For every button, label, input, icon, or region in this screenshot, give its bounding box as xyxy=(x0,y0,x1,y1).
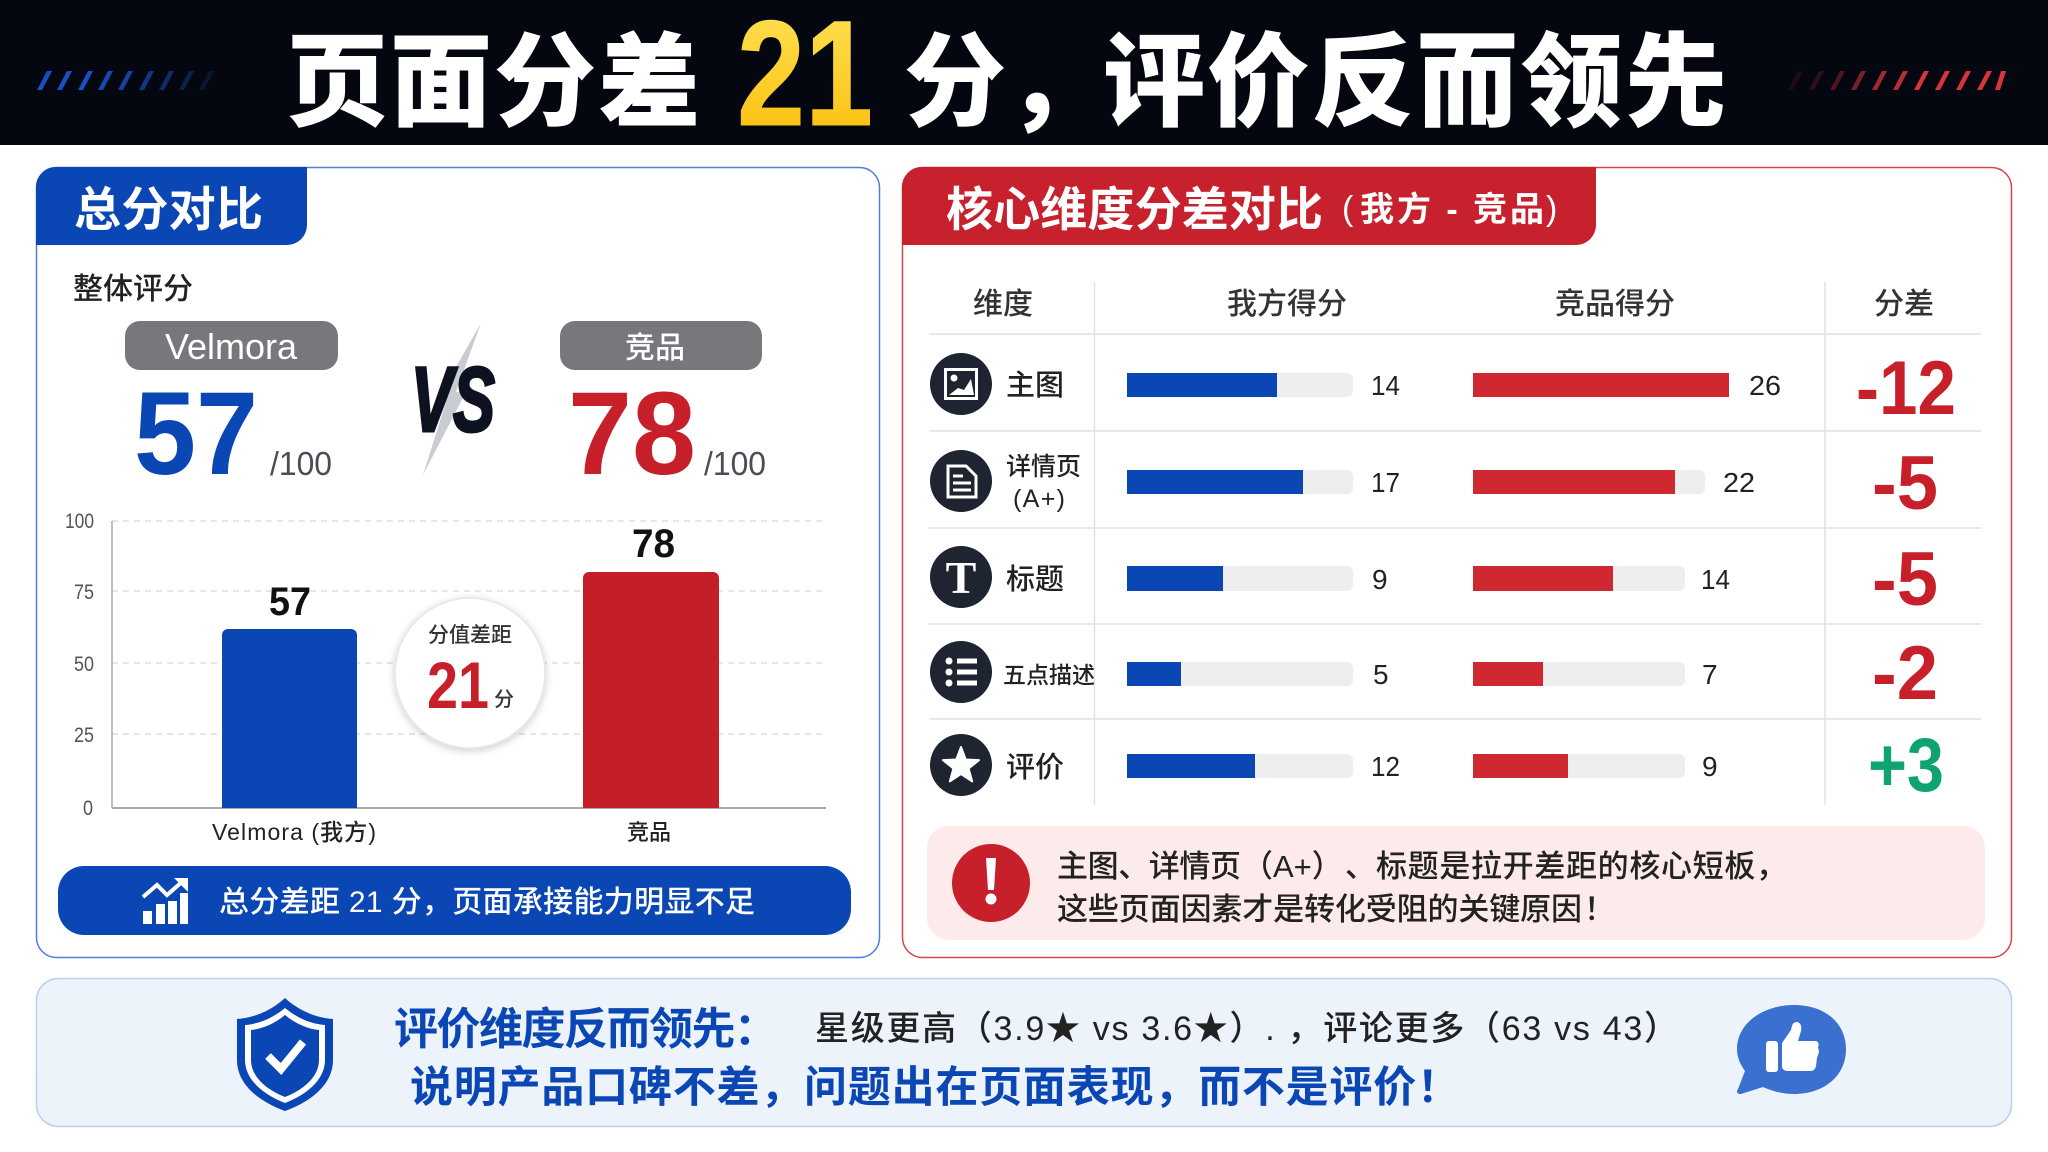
callout: key finding: 、 xyxy=(1345,849,1376,884)
gap value: -5 xyxy=(1872,441,1938,526)
bar: competitor xyxy=(583,572,719,808)
my score bar: 17 xyxy=(1371,467,1400,498)
competitor score bar xyxy=(1473,370,1781,401)
panel tab: 核心维度分差对比: ) xyxy=(1546,190,1557,228)
bar chart: total score: 25 xyxy=(74,724,94,747)
callout: score gap circle: 分值差距 xyxy=(428,624,512,647)
score: Velmora 57: /100 xyxy=(270,445,332,482)
row: 五点描述: 五点描述 xyxy=(1003,662,1095,688)
table header xyxy=(973,288,1934,321)
score: competitor 78: 78 xyxy=(568,368,696,500)
title text: 评价反而领先 xyxy=(1103,26,1727,140)
icon: list xyxy=(930,641,992,703)
bar chart: total score: 100 xyxy=(65,510,94,533)
decoration: red slashes xyxy=(1788,71,2006,90)
category labels: Velmora (我方) xyxy=(212,819,376,845)
bar chart: total score: 75 xyxy=(74,581,94,604)
my score bar xyxy=(1127,751,1400,782)
icon: VS lightning xyxy=(411,323,495,475)
my score bar: 14 xyxy=(1371,370,1400,401)
score: Velmora 57 xyxy=(134,368,332,500)
icon: letter T xyxy=(930,546,992,608)
icon: shield check xyxy=(237,998,333,1111)
table header: 维度 xyxy=(973,288,1033,321)
callout: key finding: 标题是拉开差距的核心短板， xyxy=(1376,849,1787,884)
row: 标题 xyxy=(930,537,1938,622)
competitor score bar: 26 xyxy=(1749,370,1781,401)
title text: 分， xyxy=(904,26,1108,140)
competitor score bar: 14 xyxy=(1701,564,1730,595)
gap value: -5 xyxy=(1872,537,1938,622)
callout: key finding: （A+） xyxy=(1242,849,1343,884)
table header: 竞品得分 xyxy=(1555,288,1675,321)
row: 评价: 评价 xyxy=(1006,752,1064,784)
badge: 竞品: 竞品 xyxy=(625,332,685,365)
title text xyxy=(286,0,1727,157)
icon: document xyxy=(930,450,992,512)
panel: total score comparison xyxy=(36,167,880,958)
callout: score gap circle: 21 xyxy=(427,648,489,722)
competitor score bar: 22 xyxy=(1723,467,1755,498)
summary bar: 总分差距 21 分，页面承接能力明显不足 xyxy=(219,886,755,919)
table header: 分差 xyxy=(1874,288,1934,321)
summary bar xyxy=(58,866,851,935)
callout: key finding: ！ xyxy=(1584,892,1615,927)
panel tab: 核心维度分差对比: 我方 - 竞品 xyxy=(1360,191,1544,229)
row: 五点描述 xyxy=(930,631,1938,716)
decoration: blue slashes xyxy=(37,71,214,90)
gap value: +3 xyxy=(1868,723,1944,808)
gap value: -12 xyxy=(1856,346,1956,431)
badge: Velmora: Velmora xyxy=(165,326,298,367)
score: Velmora 57: 57 xyxy=(134,368,258,500)
bar chart: total score xyxy=(65,510,826,845)
panel: core dimension comparison xyxy=(902,167,2012,958)
row: 主图: 主图 xyxy=(1006,369,1064,402)
icon: letter T: T xyxy=(946,552,976,603)
callout: key finding: 主图、详情页 xyxy=(1057,849,1241,884)
callout: score gap circle xyxy=(395,598,545,748)
bar value labels: 78 xyxy=(632,522,675,566)
badge: 竞品 xyxy=(560,321,762,370)
competitor score bar xyxy=(1473,564,1730,595)
panel tab: 总分对比 xyxy=(36,167,307,245)
title text: 页面分差 xyxy=(286,26,700,140)
icon: rising chart xyxy=(143,878,188,924)
callout: score gap circle: 分 xyxy=(494,688,514,711)
icon: exclamation xyxy=(952,844,1030,922)
my score bar xyxy=(1127,659,1389,690)
competitor score bar: 9 xyxy=(1702,751,1718,782)
bar value labels: 57 xyxy=(269,580,311,624)
icon: thumbs up bubble xyxy=(1737,1005,1846,1094)
row: 标题: 标题 xyxy=(1006,563,1064,596)
icon: star xyxy=(930,734,992,796)
my score bar xyxy=(1127,370,1400,401)
row: 评价 xyxy=(930,723,1944,808)
category labels: 竞品 xyxy=(627,820,671,845)
my score bar: 5 xyxy=(1373,659,1389,690)
competitor score bar xyxy=(1473,467,1755,498)
panel tab: 核心维度分差对比 xyxy=(902,167,1596,245)
score: competitor 78 xyxy=(568,368,766,500)
competitor score bar: 7 xyxy=(1702,659,1718,690)
my score bar xyxy=(1127,467,1400,498)
bar chart: total score: 0 xyxy=(83,797,93,820)
row: 详情页 (A+): (A+) xyxy=(1013,485,1065,513)
callout: key finding: 这些页面因素才是转化受阻的关键原因 xyxy=(1057,892,1582,927)
panel: review advantage banner xyxy=(36,978,2012,1126)
panel tab: 总分对比: 总分对比 xyxy=(74,183,263,236)
competitor score bar xyxy=(1473,751,1718,782)
bar: Velmora xyxy=(222,629,357,808)
panel tab: 核心维度分差对比: ( xyxy=(1342,190,1354,228)
icon: VS lightning: VS xyxy=(411,349,495,451)
row: 详情页 (A+) xyxy=(930,441,1938,526)
table header: 我方得分 xyxy=(1227,288,1347,321)
text: review leads: 评价维度反而领先： xyxy=(394,1005,778,1054)
row: 详情页 (A+): 详情页 xyxy=(1006,453,1081,481)
bar chart: total score: 50 xyxy=(74,653,94,676)
my score bar: 9 xyxy=(1372,564,1388,595)
gap value: -2 xyxy=(1872,631,1938,716)
category labels xyxy=(212,819,671,845)
header banner xyxy=(0,0,2048,157)
text: review leads: 星级更高（3.9★ vs 3.6★）. ，评论更多（63 vs 43） xyxy=(815,1010,1678,1048)
icon: image xyxy=(930,353,992,415)
callout: key finding xyxy=(927,826,1985,940)
score: competitor 78: /100 xyxy=(704,445,766,482)
competitor score bar xyxy=(1473,659,1718,690)
my score bar: 12 xyxy=(1371,751,1400,782)
row: 主图 xyxy=(930,346,1956,431)
my score bar xyxy=(1127,564,1388,595)
text: review leads xyxy=(394,1005,1678,1054)
text: conclusion: 说明产品口碑不差，问题出在页面表现，而不是评价！ xyxy=(410,1064,1460,1112)
bar value labels xyxy=(269,522,675,624)
panel tab: 核心维度分差对比: 核心维度分差对比 xyxy=(946,183,1323,236)
badge: Velmora xyxy=(125,321,338,370)
subheading: 整体评分 xyxy=(73,273,193,306)
